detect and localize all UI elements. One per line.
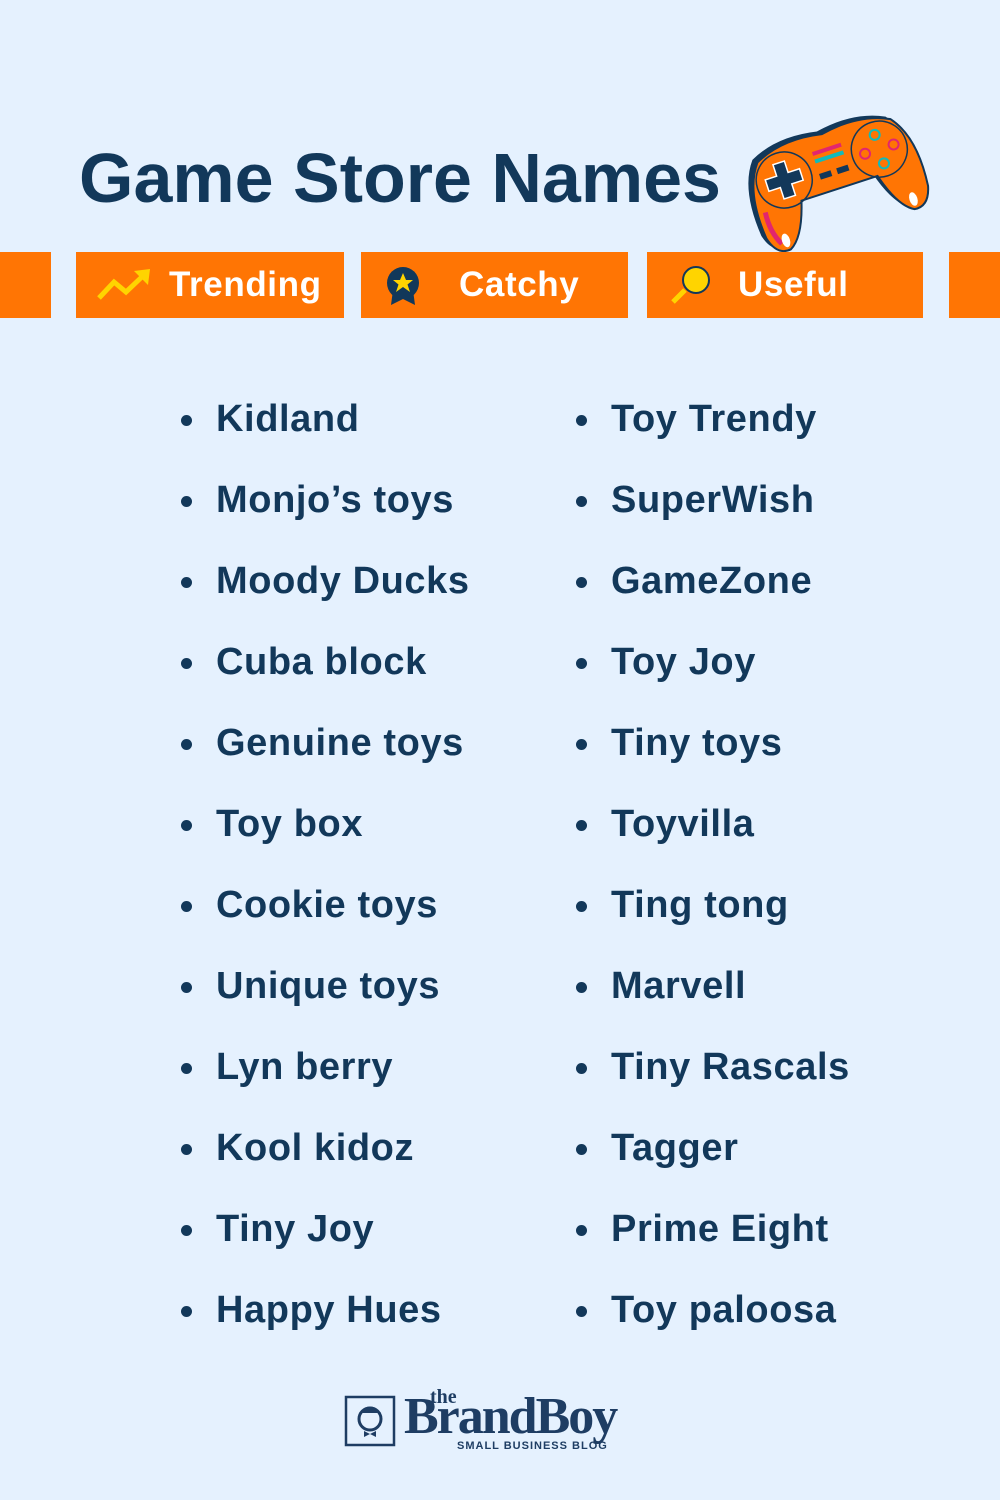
logo: the BrandBoy — [344, 1386, 618, 1452]
logo: the BrandBoy: the — [430, 1386, 457, 1408]
tab: Useful: Useful — [738, 265, 849, 304]
tab: Trending: Trending — [169, 265, 322, 304]
list: right column: Tiny Rascals — [611, 1046, 850, 1088]
list: left column: Kool kidoz — [216, 1127, 414, 1169]
list: left column: Monjo’s toys — [216, 479, 454, 521]
list: right column: Tiny toys — [611, 722, 783, 764]
list: left column: Kidland — [216, 398, 360, 440]
tab: Catchy: Catchy — [459, 265, 579, 304]
title: Game Store Names — [79, 139, 721, 217]
icon: logo face box — [344, 1396, 396, 1446]
tab: Useful — [647, 252, 923, 318]
list: right column — [576, 398, 850, 1331]
list: right column: Ting tong — [611, 884, 789, 926]
tab: Trending — [76, 252, 344, 318]
logo: the BrandBoy: BrandBoy — [404, 1388, 616, 1445]
list: right column: Prime Eight — [611, 1208, 829, 1250]
list: left column — [181, 398, 470, 1331]
list: right column: Marvell — [611, 965, 746, 1007]
list: left column: Unique toys — [216, 965, 440, 1007]
list: left column: Toy box — [216, 803, 363, 845]
list: left column: Cookie toys — [216, 884, 438, 926]
list: left column: Lyn berry — [216, 1046, 393, 1088]
list: right column: Toy paloosa — [611, 1289, 836, 1331]
list: right column: Toy Trendy — [611, 398, 817, 440]
tab: Catchy — [361, 252, 628, 318]
list: right column: Tagger — [611, 1127, 738, 1169]
icon: magnifier — [671, 266, 710, 304]
list: right column: GameZone — [611, 560, 812, 602]
list: left column: Cuba block — [216, 641, 427, 683]
list: left column: Happy Hues — [216, 1289, 442, 1331]
icon: badge — [387, 267, 419, 305]
list: left column: Tiny Joy — [216, 1208, 374, 1250]
logo: the BrandBoy: SMALL BUSINESS BLOG — [457, 1440, 608, 1452]
tab stub right — [949, 252, 1000, 318]
list: right column: Toyvilla — [611, 803, 754, 845]
tab stub left — [0, 252, 51, 318]
list: right column: Toy Joy — [611, 641, 756, 683]
list: left column: Genuine toys — [216, 722, 464, 764]
list: left column: Moody Ducks — [216, 560, 470, 602]
icon: gamepad — [748, 116, 930, 252]
icon: trend arrow — [97, 269, 150, 300]
list: right column: SuperWish — [611, 479, 815, 521]
